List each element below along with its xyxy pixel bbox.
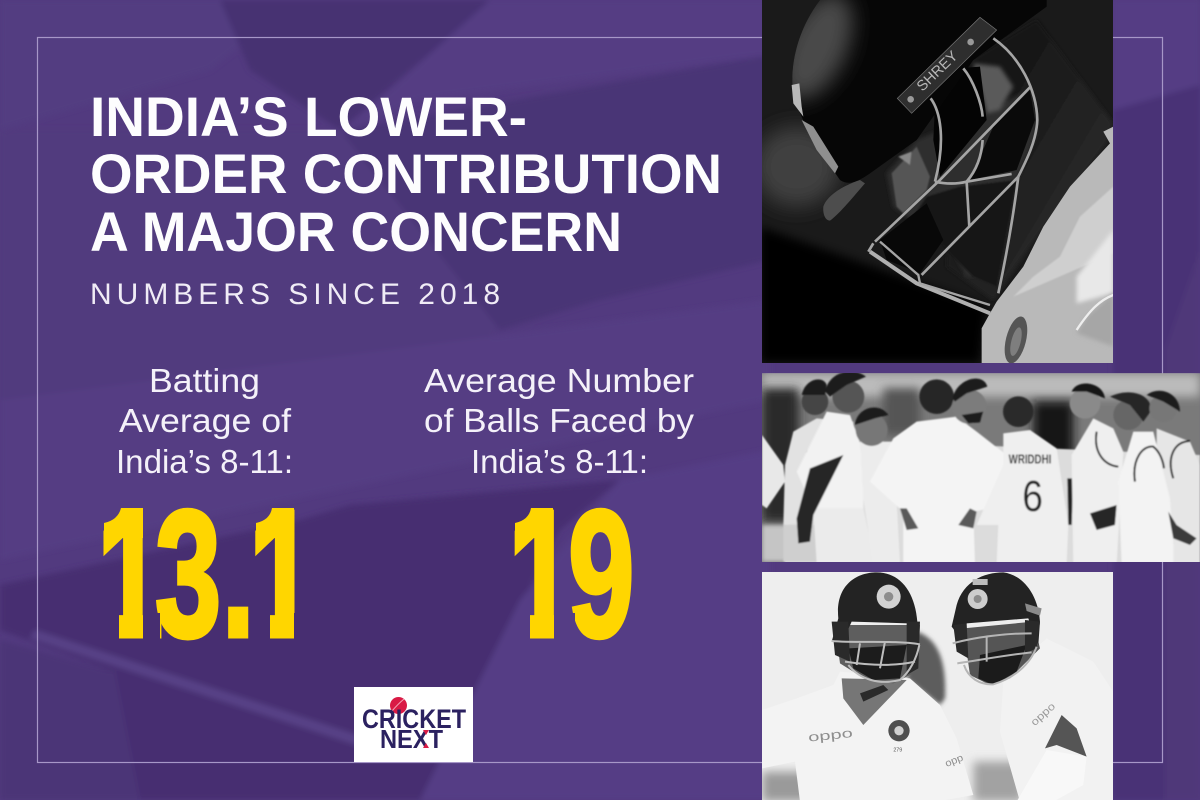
background blurred player bbox=[907, 632, 945, 705]
stat: balls faced bbox=[424, 368, 694, 640]
right group of players bbox=[1070, 383, 1200, 563]
stat label: balls faced: Average Number bbox=[424, 362, 694, 399]
batsman right bbox=[952, 572, 1086, 800]
subtitle: NUMBERS SINCE 2018 bbox=[90, 278, 500, 311]
helmet shell bbox=[792, 0, 1047, 183]
player WRIDDHI: WRIDDHI bbox=[1009, 453, 1051, 467]
photo: two batsmen running bbox=[762, 572, 1113, 800]
batsman left: oppo bbox=[808, 726, 853, 745]
stat: batting average bbox=[104, 368, 294, 640]
stat label: batting average: Average of bbox=[119, 402, 292, 439]
logo: Cricket Next: CRICKET bbox=[362, 704, 466, 734]
metal grille bbox=[868, 38, 1037, 313]
player 94 back bbox=[783, 379, 860, 562]
batsman right: oppo bbox=[1029, 700, 1058, 729]
title: A MAJOR CONCERN bbox=[90, 200, 622, 263]
neck bbox=[970, 82, 1112, 296]
chest crest bbox=[888, 720, 910, 741]
stat label: balls faced: of Balls Faced by bbox=[424, 402, 695, 439]
player WRIDDHI bbox=[977, 396, 1068, 563]
player 94 back: 94 bbox=[805, 442, 826, 483]
logo: Cricket Next: NEXT bbox=[380, 724, 443, 754]
player cap left bbox=[797, 372, 875, 563]
title: INDIA’S LOWER- bbox=[90, 85, 527, 148]
helmet peak bbox=[823, 180, 865, 221]
face bbox=[887, 90, 1037, 277]
stat label: balls faced bbox=[424, 362, 695, 480]
stat label: balls faced: India’s 8-11: bbox=[471, 443, 648, 480]
player WRIDDHI: 6 bbox=[1022, 473, 1043, 521]
crest bbox=[1004, 316, 1028, 363]
stat value: 19: 19 bbox=[508, 474, 634, 675]
grille bar with SHREY text bbox=[897, 17, 997, 113]
central player back bbox=[891, 378, 1004, 562]
dim background glow bbox=[762, 0, 1113, 363]
body mass of team bbox=[785, 442, 1200, 563]
batsman left: 279 bbox=[893, 748, 902, 754]
photo: team huddle bbox=[762, 372, 1200, 563]
stat label: batting average bbox=[116, 362, 293, 480]
batsman left bbox=[762, 572, 973, 800]
shirt bbox=[982, 127, 1113, 363]
grille bar with SHREY text: SHREY bbox=[914, 48, 962, 95]
icon: cricket ball bbox=[390, 697, 407, 714]
batsman left: opp bbox=[944, 752, 966, 770]
title bbox=[90, 85, 722, 263]
helmet flag bbox=[792, 83, 803, 117]
stat value: 13.1 bbox=[104, 508, 294, 640]
stat label: batting average: Batting bbox=[149, 362, 260, 399]
stat value: 13.1: 13.1 bbox=[97, 474, 315, 675]
young player smiling bbox=[855, 407, 900, 563]
title: ORDER CONTRIBUTION bbox=[90, 142, 722, 205]
logo: Cricket Next bbox=[354, 687, 473, 762]
stat label: batting average: India’s 8-11: bbox=[116, 443, 293, 480]
far-left player bbox=[762, 435, 785, 508]
stat value: 19 bbox=[514, 508, 632, 640]
captain bbox=[952, 378, 987, 424]
photo: batsman in helmet, head bowed bbox=[753, 0, 1113, 366]
